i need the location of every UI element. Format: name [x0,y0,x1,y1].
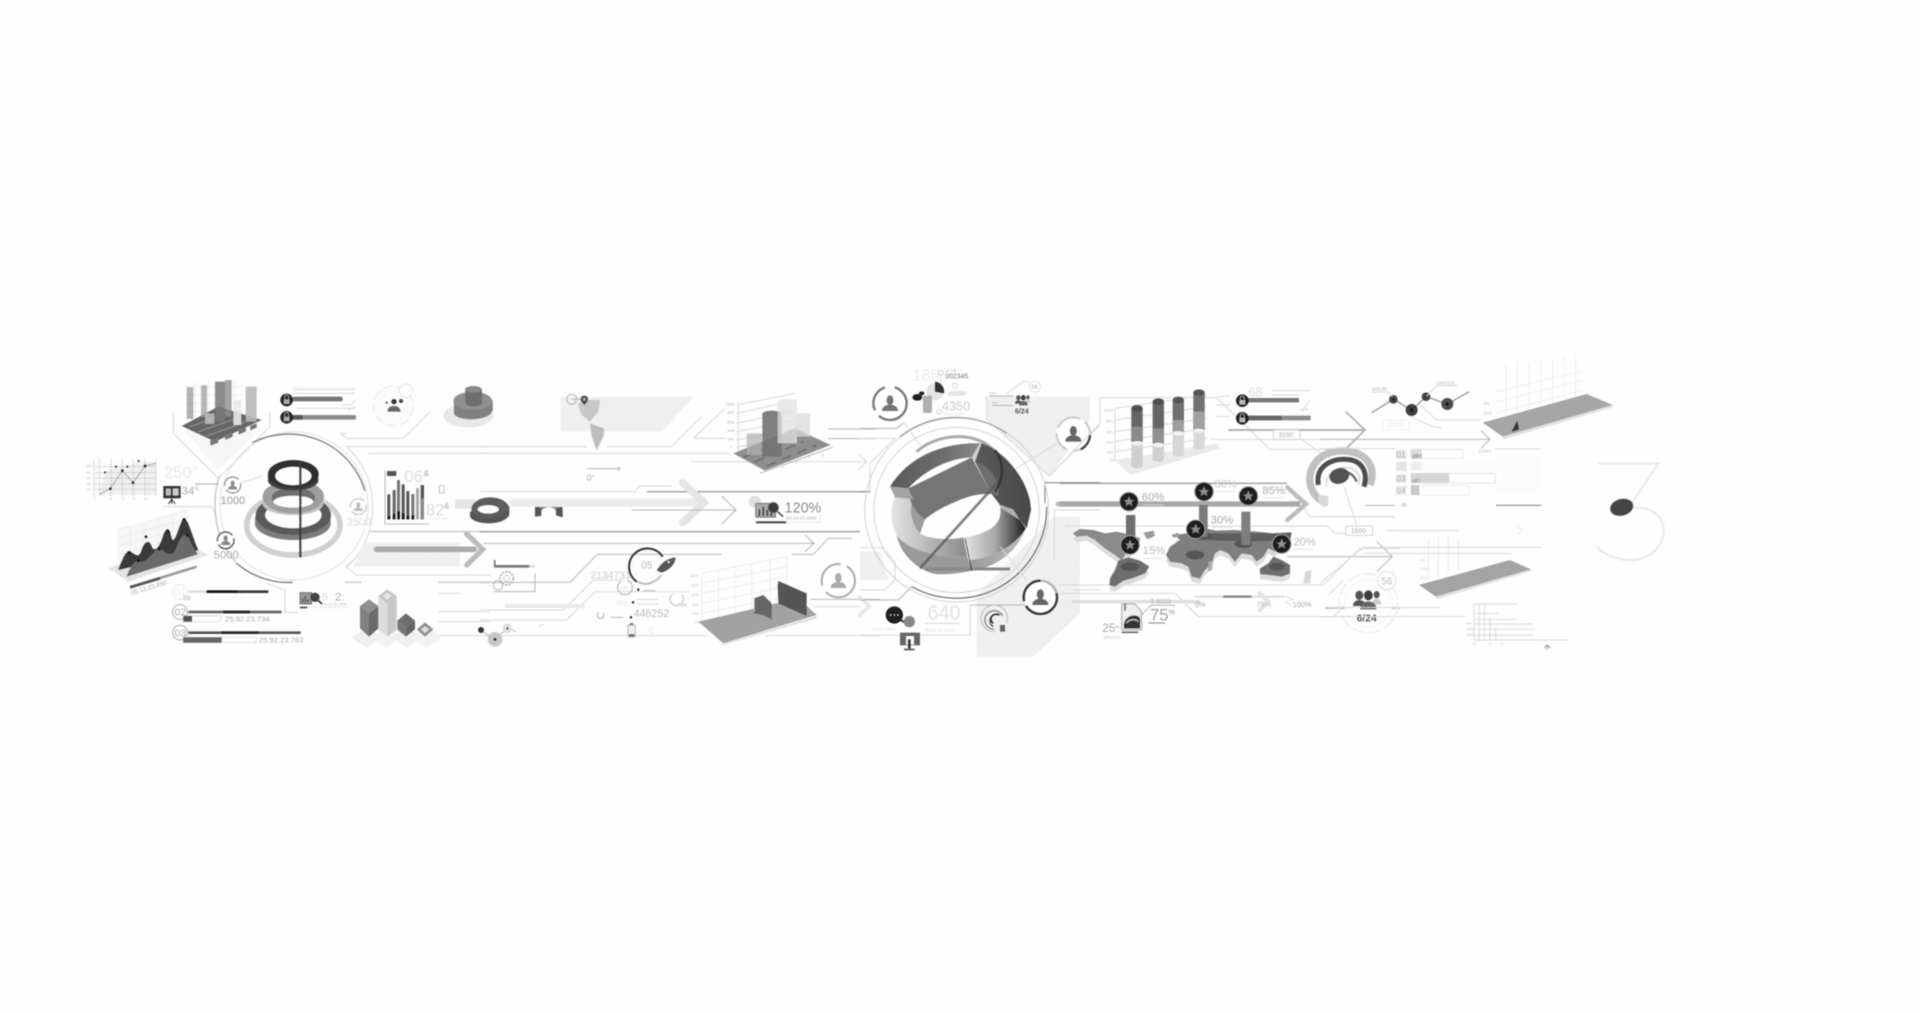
line nodes [478,624,516,647]
people circle icon [373,384,413,426]
lower right platform [1419,535,1531,599]
lower right platform: 40% [1420,576,1428,580]
dashboard stats top: 252550 [948,391,966,397]
numbered list: 457 [1412,478,1421,484]
line chart panel: 50 [122,499,125,501]
right fading cluster [1320,355,1664,650]
scattered process numbers: E [648,625,655,635]
3D walls chart: 80% [692,584,700,588]
circuit lines map [1060,398,1400,617]
chat and monitor icons [871,606,920,650]
document with stats: 5.9223 [1151,599,1171,606]
640 stat: 640 [927,602,961,624]
right chevron arrow with 3100 [1210,412,1400,455]
linked nodes: 3940115 [1436,380,1455,386]
3D bar chart top left [173,380,270,478]
list row 03 [173,625,303,644]
250 percent stat: 250 [164,463,192,482]
line chart panel [86,458,156,501]
central hub cluster [860,368,1100,657]
northern asia shade [1207,532,1292,542]
map percents: 60% [1142,492,1164,504]
south america [1109,557,1149,587]
faded axis chart [1467,604,1568,650]
34 percent stat: % [194,487,199,493]
line chart panel: 0 [94,499,96,501]
dashboard stats top [912,368,970,416]
3D walls chart: 40% [692,603,700,607]
wedge end face [890,487,913,499]
star badge 20 [1272,535,1291,553]
user badge bottom right [1000,547,1057,614]
list row 03: 03 [175,628,186,639]
magnifier mini stat: 00.12.23.4566 [323,603,347,607]
percent slider: 0% [1195,600,1206,609]
2700 tag: 2700 [1387,421,1404,430]
line chart panel: 40% [87,484,91,486]
map land [1073,527,1312,587]
percent slider: 100% [1293,600,1312,609]
lock progress bars [280,384,356,424]
line chart panel: 75 [133,499,136,501]
3D mountain chart: 00.12.23.450 [130,579,168,597]
cylinder three [1173,397,1184,457]
640 stat: @12.23.4566 [925,627,955,633]
3D cylinder bars chart: 0 [731,445,733,449]
linked nodes: 123.45 [1372,387,1387,393]
map percents: 80% [1214,478,1237,490]
user badge top right [1017,417,1090,468]
06 and 82 bar chart: 82 [426,500,445,519]
map pin bases [1121,532,1285,571]
cylinder one [1131,405,1143,468]
lower-left outer wall [897,535,972,574]
lower-right top surface [965,507,1026,560]
people counter right [1339,572,1398,633]
3D cylinder bars chart: 0 [782,465,784,469]
numbered list [1396,449,1541,507]
numbered list: 03 [1396,474,1406,484]
faded axis chart: 20% [1467,628,1473,632]
line chart panel: 100 [144,499,149,501]
cylinder two [1153,398,1164,462]
dashboard stats top: 4350 [942,400,970,414]
250 percent stat: % [192,464,199,473]
main circular frame [215,432,373,582]
list row 03: 25.92.23.763 [259,635,303,644]
scattered process numbers [591,571,687,637]
islands [1143,531,1312,583]
cylinder chart: 0% [1109,459,1115,463]
2700 tag [1383,420,1409,430]
numbered list: g&d [1412,453,1422,459]
lock progress bars: 37 [293,384,305,396]
3D cylinder bars chart [726,393,833,473]
people counter top: 24% [989,391,997,395]
lower right platform: 20% [1420,567,1428,571]
cylinder four [1193,389,1205,450]
dashboard stats top: 00.12.23.456 [944,412,964,416]
3D walls chart: 100% [689,574,699,578]
concentric arc icon [981,605,1008,632]
right chevron arrow with 3100: 3100 [1278,432,1293,439]
cylinder chart: 60% [1106,430,1114,434]
map thick arrow [1060,487,1306,520]
640 stat [925,602,961,633]
star badge 15 [1121,536,1139,554]
pale arc above ring [917,437,995,452]
presentation board icon [163,486,181,504]
north america [1073,529,1140,560]
inner wall main [908,457,992,519]
scattered process numbers: 446252 [634,608,669,620]
line chart panel: 25 [109,499,113,501]
lock bars right [1217,386,1311,425]
faded axis chart: 20 [1500,642,1504,646]
map of americas on hatched panel [561,394,694,451]
linked nodes [1372,380,1480,427]
dashboard stats top: 29.795 [945,369,956,373]
map percents: 30% [1211,514,1233,526]
document with stats [1102,599,1176,640]
diagonal strokes [920,483,997,568]
document with stats: % [1115,624,1120,630]
people counter top: 5% [992,401,998,405]
3D cylinder pie [443,386,493,428]
stacked 3D rings [247,460,340,557]
rocket gauge [629,548,676,584]
numbered list: 11322 [1478,449,1491,454]
map percents: 15% [1143,545,1165,557]
document with stats: 3495.9223 [1103,636,1121,640]
document with stats: 75 [1150,605,1169,624]
concentric half donut [1310,451,1372,525]
zero percent slider: 0 [587,473,591,483]
center-left infographic cluster [470,393,880,647]
rocket gauge: 05 [641,560,653,571]
document with stats: 25 [1102,622,1115,635]
faded axis chart: 10 [1488,642,1492,646]
map percents: 20% [1293,536,1316,548]
3D cylinder bars chart: 2 [808,456,810,460]
scattered process numbers: 2134731 [591,571,631,582]
3D cylinder bars chart: 100% [726,403,735,407]
user badge 3500 [346,499,372,529]
3D ring piece [470,497,509,523]
chat and monitor icons: 12.06.2017 [871,627,897,633]
top right platform: 20% [1483,411,1492,416]
hole [920,494,999,539]
star badge 85 [1239,487,1258,505]
lower right platform: 4% [1420,559,1426,563]
australia [1260,557,1290,577]
3D walls chart: 20% [692,612,700,616]
06 and 82 bar chart: & [444,502,450,511]
zero percent slider [587,467,620,483]
map cluster [1060,386,1400,640]
numbered progress list: 25.92.23.450 [208,596,241,602]
magnifier mini stat [300,592,349,608]
large numeral three [1597,463,1664,560]
cylinder chart: 40% [1106,440,1114,444]
1500 tag [1346,526,1373,535]
user badge mid [822,564,855,597]
cylinder chart [1104,389,1220,475]
user badge 5000: 5000 [214,550,239,562]
scattered process numbers: 06 [621,586,629,592]
list row 02: 25.92.23.734 [225,615,270,624]
user badge 1000 [221,476,263,507]
250 percent stat [164,463,218,484]
document with stats: % [1169,607,1176,616]
06 and 82 bar chart: & [424,469,430,478]
map shadow [1073,532,1292,592]
magnifier mini stat: 5 [322,592,328,604]
list row 02: 02 [175,608,186,619]
list row 02 [173,605,282,624]
big 3D ring chart [890,437,1031,574]
user badge 1000: 1000 [221,495,245,507]
map cylinders [1126,515,1135,539]
faded axis chart: 0 [1473,642,1475,646]
3D walls chart [689,557,817,645]
top right platform [1483,355,1613,439]
people counter top [989,381,1041,415]
numbered list: 04 [1396,486,1406,496]
cylinder north [1199,505,1208,537]
3D cylinder bars chart: 40% [727,429,734,433]
cylinder chart: 100% [1104,409,1114,413]
thick arrow left [353,504,483,567]
dashboard stats top: 185 [913,368,939,385]
line chart panel: 60% [87,478,91,480]
top right platform: 4% [1483,401,1490,406]
right segment [975,443,1031,528]
3D cylinder bars chart: 3 [822,454,824,458]
scattered process numbers: 90 [617,598,626,608]
top outer surface [890,443,982,488]
3D cylinder bars chart: 20% [727,438,734,442]
3D cylinder bars chart: 60% [727,420,734,424]
120 percent stat: 00.12.23.4566 [787,515,817,520]
percent slider [1072,592,1312,612]
people counter right: 56 [1381,577,1393,588]
lock bars right: 68 [1248,386,1262,400]
hatched backing panels [860,397,1100,657]
cylinder east [1241,512,1250,545]
map percents [1142,478,1316,558]
map percents: 85% [1262,485,1285,497]
06 and 82 bar chart [385,467,450,524]
circuit lines mid [480,408,880,636]
magnifier mini stat: 2: [335,592,344,604]
percent slider: 75% [1257,600,1272,609]
faded circuit lines [1320,431,1542,617]
user badge top left [873,387,920,445]
3D arch piece [535,499,563,517]
user badge 3500: 3500 [346,517,372,529]
numbered list: 01 [1396,449,1406,459]
120 percent stat [749,496,822,523]
cylinder chart: 20% [1106,450,1114,454]
star badge 30 [1186,520,1205,539]
people counter right: 6/24 [1357,613,1377,624]
faded axis chart: 4% [1467,622,1472,626]
3D cylinder bars chart: 80% [727,411,734,415]
people counter top: 6/24 [1015,408,1029,415]
cylinder chart: 80% [1106,420,1114,424]
34 percent stat: 34 [182,485,194,497]
numbered progress list: 01 [175,588,186,599]
user badge 5000 [214,532,239,562]
3D cylinder bars chart: 1 [795,461,797,465]
zero percent slider: % [591,474,595,479]
120 percent stat: 120% [785,500,822,516]
hub circular frame [865,417,1049,602]
inner wall left [908,488,925,533]
circuit lines left [162,412,490,636]
lower-right outer wall [969,528,1026,571]
faded axis chart: 40% [1467,633,1473,637]
people counter top: 56 [1031,385,1039,391]
06 and 82 bar chart: 06 [404,467,423,486]
line chart panel: 100% [86,466,92,468]
small slider with gears [493,560,535,592]
isometric bars [352,589,442,648]
circuit lines centre [860,423,1100,635]
dashboard stats top: 002345 [945,373,968,380]
left infographic cluster [86,380,493,648]
lower-left top surface [891,497,967,557]
06 and 82 bar chart: 00.12.23.4566 [427,517,449,521]
star badge 80 [1195,482,1213,501]
star badge 60 [1120,492,1138,511]
world map [1073,478,1316,592]
line chart panel: 80% [87,473,91,475]
line chart panel: 20% [87,489,91,491]
3D walls chart: 60% [692,593,700,597]
3D mountain chart [108,509,208,597]
1500 tag: 1500 [1351,528,1366,535]
pale arrow [510,483,736,524]
eurasia and africa [1166,527,1292,578]
3D walls chart: 0% [695,620,701,624]
numbered progress list [173,585,303,644]
